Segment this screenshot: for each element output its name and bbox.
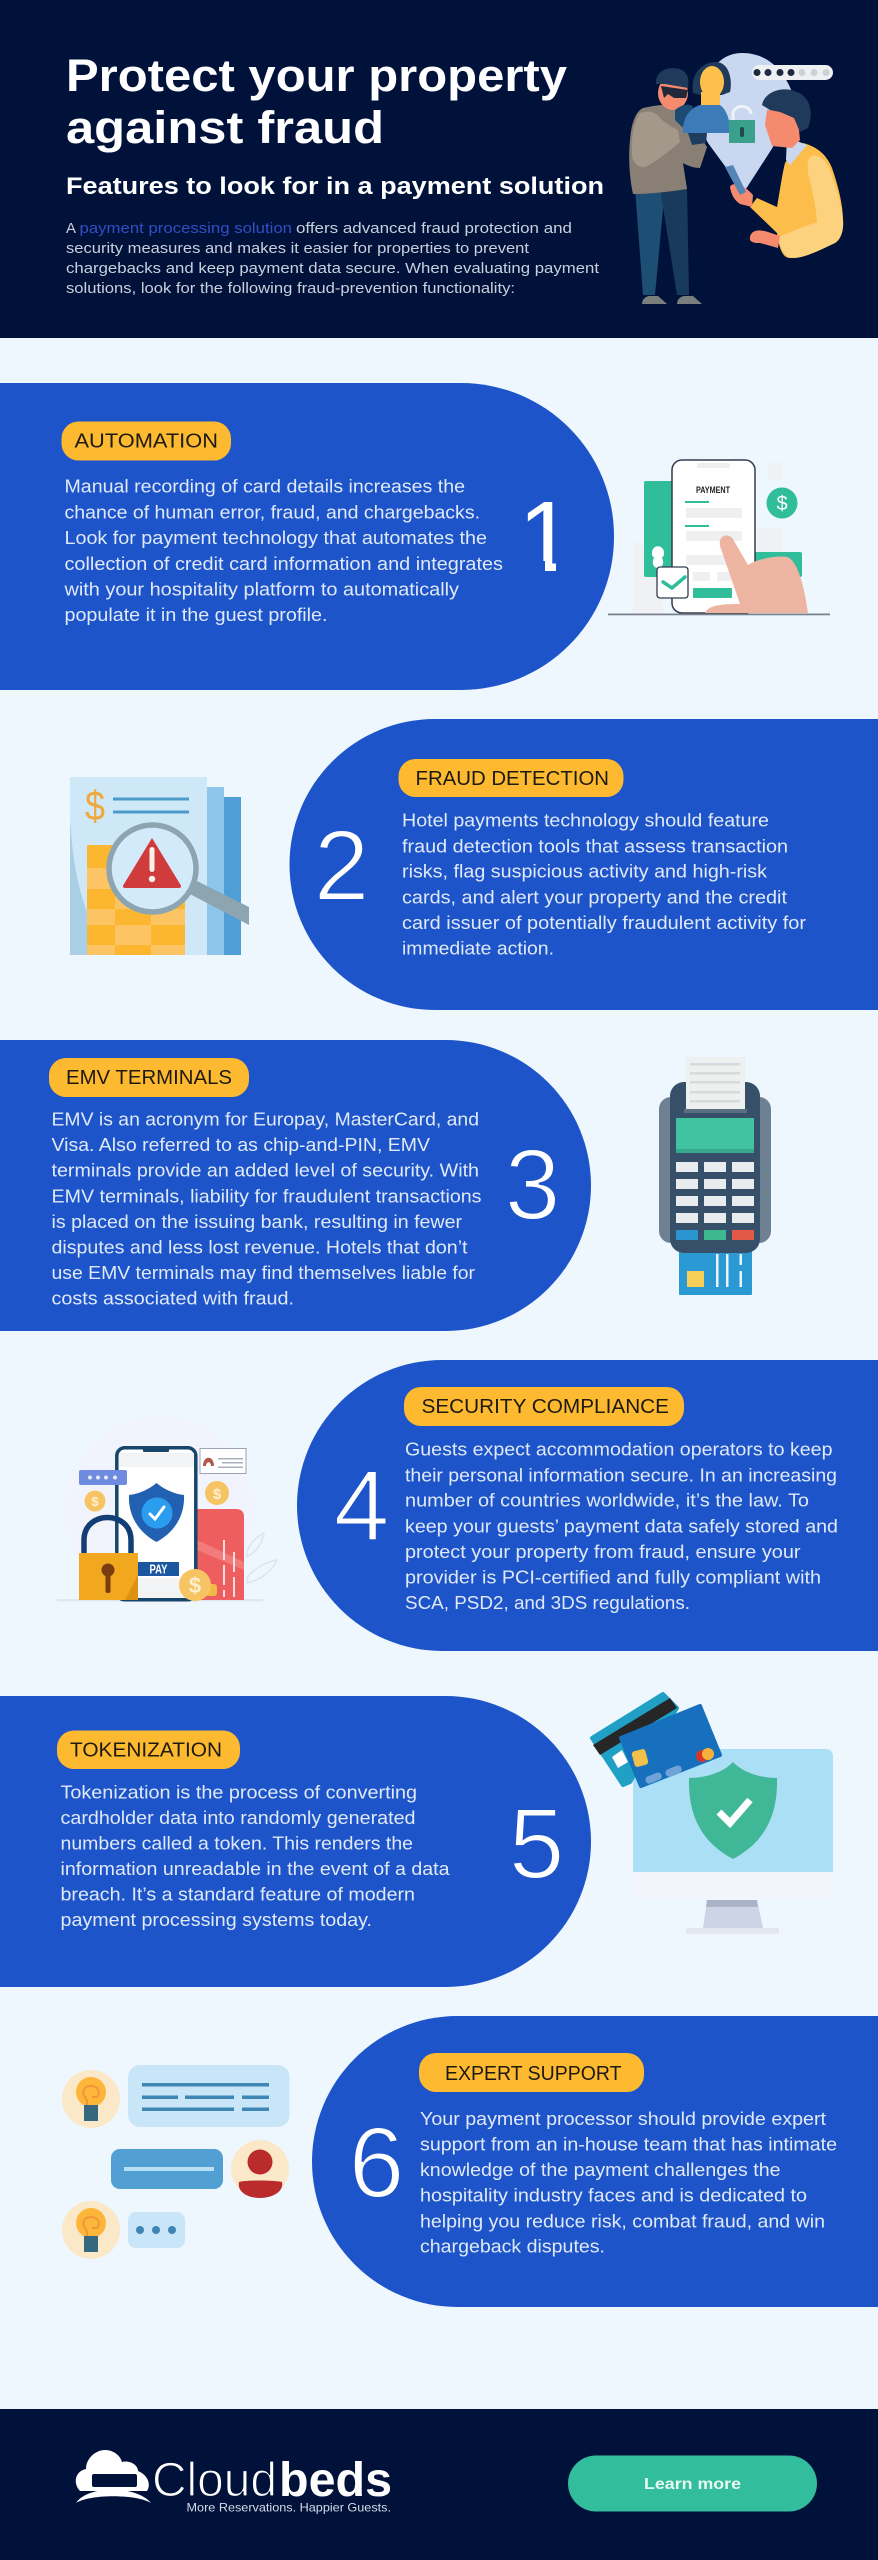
logo: Cloudbeds bbox=[76, 2450, 392, 2515]
text: security compliance body: protect your property from fraud, ensure your bbox=[405, 1542, 800, 1562]
text: fraud detection body: fraud detection tools that assess transaction bbox=[402, 836, 788, 856]
panel: 3 EMV terminals bbox=[0, 1040, 591, 1331]
text: EMV terminals body: EMV terminals, liability for fraudulent transactions bbox=[52, 1186, 482, 1206]
icon: phone payment with hand bbox=[608, 460, 830, 615]
logo: Cloudbeds: More Reservations. Happier Guests. bbox=[186, 2501, 391, 2515]
text: automation body: populate it in the guest profile. bbox=[64, 605, 328, 625]
icon: document with magnifier and warning: $ bbox=[85, 782, 105, 829]
badge: EMV terminals: EMV TERMINALS bbox=[66, 1066, 232, 1089]
title: against fraud bbox=[66, 102, 384, 153]
text: EMV terminals body bbox=[52, 1110, 482, 1309]
illustration: fraudster, agent and customer bbox=[629, 53, 843, 304]
text: security compliance body bbox=[405, 1440, 838, 1613]
text: EMV terminals body: costs associated with fraud. bbox=[52, 1289, 294, 1309]
text: security compliance body: Guests expect accommodation operators to keep bbox=[405, 1440, 832, 1460]
logo: Cloudbeds: Cloud bbox=[152, 2454, 277, 2507]
text: security compliance body: number of countries worldwide, it’s the law. To bbox=[405, 1491, 809, 1511]
text: security compliance body: SCA, PSD2, and 3DS regulations. bbox=[405, 1593, 690, 1613]
text: fraud detection body bbox=[402, 811, 806, 958]
text: tokenization body: Tokenization is the process of converting bbox=[60, 1782, 417, 1802]
panel: 6 expert support bbox=[312, 2016, 878, 2307]
text: expert support body: knowledge of the payment challenges the bbox=[420, 2160, 780, 2180]
badge: automation bbox=[62, 422, 231, 460]
icon: support chat bubbles bbox=[62, 2065, 290, 2259]
icon: phone payment with hand: PAYMENT bbox=[696, 485, 730, 495]
text: expert support body bbox=[420, 2109, 837, 2257]
icon: document with magnifier and warning bbox=[70, 777, 249, 955]
text: expert support body: helping you reduce risk, combat fraud, and win bbox=[420, 2211, 825, 2231]
text: EMV terminals body: is placed on the issuing bank, resulting in fewer bbox=[52, 1212, 462, 1232]
text: fraud detection body: cards, and alert your property and the credit bbox=[402, 887, 787, 907]
text: tokenization body: payment processing systems today. bbox=[60, 1910, 372, 1930]
text: expert support body: Your payment processor should provide expert bbox=[420, 2109, 826, 2129]
text: fraud detection body: Hotel payments technology should feature bbox=[402, 811, 769, 831]
text: automation body: with your hospitality platform to automatically bbox=[63, 580, 459, 600]
text: expert support body: support from an in-house team that has intimate bbox=[420, 2135, 837, 2155]
icon: phone security with padlock: $ bbox=[189, 1573, 201, 1598]
title bbox=[66, 50, 567, 153]
text: tokenization body: breach. It’s a standard feature of modern bbox=[60, 1885, 415, 1905]
text: automation body: Manual recording of card details increases the bbox=[64, 477, 465, 497]
text: security compliance body: provider is PCI-certified and fully compliant with bbox=[405, 1567, 821, 1587]
text: security compliance body: their personal information secure. In an increasing bbox=[405, 1465, 837, 1485]
badge: tokenization bbox=[57, 1730, 240, 1769]
panel: 4 security compliance bbox=[297, 1360, 878, 1651]
text: EMV terminals body: Visa. Also referred to as chip-and-PIN, EMV bbox=[52, 1135, 430, 1155]
number 1: 1 bbox=[518, 481, 574, 593]
number 4: 4 bbox=[334, 1450, 389, 1562]
text: fraud detection body: card issuer of potentially fraudulent activity for bbox=[402, 913, 806, 933]
text: tokenization body bbox=[60, 1782, 451, 1930]
text: tokenization body: cardholder data into randomly generated bbox=[60, 1808, 415, 1828]
panel: header bbox=[0, 0, 878, 338]
badge: expert support bbox=[419, 2053, 644, 2092]
text: security compliance body: keep your guests’ payment data safely stored and bbox=[405, 1516, 838, 1536]
number 6: 6 bbox=[349, 2107, 404, 2219]
icon: phone security with padlock: $ bbox=[213, 1486, 222, 1503]
text: automation body: collection of credit card information and integrates bbox=[64, 554, 503, 574]
text: automation body: Look for payment technology that automates the bbox=[64, 528, 487, 548]
intro paragraph bbox=[66, 220, 600, 297]
button: learn more bbox=[568, 2456, 817, 2512]
badge: fraud detection: FRAUD DETECTION bbox=[416, 767, 609, 790]
badge: tokenization: TOKENIZATION bbox=[70, 1739, 222, 1762]
button: learn more: Learn more bbox=[644, 2476, 741, 2493]
subtitle: Features to look for in a payment solution bbox=[66, 173, 604, 200]
icon: phone payment with hand: $ bbox=[776, 493, 788, 515]
text: expert support body: hospitality industry faces and is dedicated to bbox=[420, 2186, 807, 2206]
intro paragraph: A bbox=[66, 220, 76, 237]
panel: 5 tokenization bbox=[0, 1696, 591, 1987]
intro paragraph: payment processing solution bbox=[80, 220, 292, 237]
number 3: 3 bbox=[505, 1129, 560, 1241]
number 5: 5 bbox=[509, 1788, 564, 1900]
text: fraud detection body: risks, flag suspicious activity and high-risk bbox=[402, 862, 768, 882]
icon: phone security with padlock: PAY bbox=[150, 1562, 168, 1576]
intro paragraph: security measures and makes it easier for properties to prevent bbox=[66, 240, 530, 257]
badge: EMV terminals bbox=[49, 1058, 249, 1097]
text: tokenization body: numbers called a token. This renders the bbox=[60, 1833, 413, 1853]
logo: Cloudbeds: beds bbox=[279, 2454, 392, 2507]
text: EMV terminals body: EMV is an acronym for Europay, MasterCard, and bbox=[52, 1110, 479, 1130]
icon: monitor with shield and cards bbox=[592, 1694, 833, 1934]
icon: phone security with padlock bbox=[57, 1415, 277, 1605]
text: fraud detection body: immediate action. bbox=[402, 938, 554, 958]
icon: phone security with padlock: $ bbox=[91, 1494, 99, 1509]
text: expert support body: chargeback disputes. bbox=[420, 2237, 605, 2257]
text: EMV terminals body: terminals provide an added level of security. With bbox=[52, 1161, 479, 1181]
intro paragraph: offers advanced fraud protection and bbox=[296, 220, 572, 237]
text: EMV terminals body: disputes and less lost revenue. Hotels that don’t bbox=[52, 1238, 468, 1258]
text: automation body bbox=[63, 477, 503, 625]
text: tokenization body: information unreadable in the event of a data bbox=[60, 1859, 451, 1879]
intro paragraph: chargebacks and keep payment data secure. When evaluating payment bbox=[66, 260, 600, 277]
number 2: 2 bbox=[314, 810, 369, 922]
panel: 1 automation bbox=[0, 383, 614, 690]
text: EMV terminals body: use EMV terminals may find themselves liable for bbox=[52, 1263, 475, 1283]
title: Protect your property bbox=[66, 50, 567, 101]
text: automation body: chance of human error, fraud, and chargebacks. bbox=[64, 502, 480, 522]
panel: footer bbox=[0, 2409, 878, 2560]
badge: security compliance bbox=[404, 1387, 684, 1426]
badge: automation: AUTOMATION bbox=[74, 430, 218, 452]
intro paragraph: solutions, look for the following fraud-prevention functionality: bbox=[66, 280, 515, 297]
badge: expert support: EXPERT SUPPORT bbox=[445, 2062, 622, 2085]
icon: payment terminal bbox=[659, 1057, 771, 1295]
badge: fraud detection bbox=[398, 759, 624, 797]
badge: security compliance: SECURITY COMPLIANCE bbox=[422, 1395, 669, 1418]
panel: 2 fraud detection bbox=[290, 719, 878, 1010]
